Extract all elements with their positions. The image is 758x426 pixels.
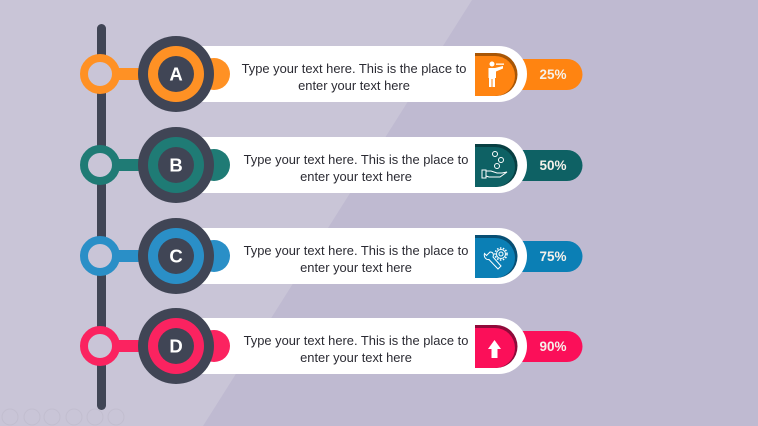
- percentage tag C: 75%: [539, 249, 567, 264]
- percentage tag C: [510, 241, 582, 272]
- white card A: [200, 46, 527, 102]
- text A: Type your text here. This is the place to: [242, 61, 466, 76]
- white card B: [200, 137, 527, 193]
- node C: C: [169, 246, 183, 266]
- node D: [84, 308, 214, 384]
- node A: [84, 36, 214, 112]
- row C: [84, 218, 582, 294]
- node A: A: [169, 64, 183, 84]
- percentage tag A: 25%: [539, 67, 567, 82]
- icon: person with telescope: [475, 53, 518, 96]
- half circle C: [198, 240, 230, 272]
- white card C: [200, 228, 527, 284]
- icon: up arrow: [475, 325, 518, 368]
- text C: Type your text here. This is the place to: [244, 243, 468, 258]
- icon: hand with coins: [475, 144, 518, 187]
- text B: enter your text here: [300, 169, 412, 184]
- text B: Type your text here. This is the place to: [244, 152, 468, 167]
- text C: enter your text here: [300, 260, 412, 275]
- half circle A: [198, 58, 230, 90]
- icon: wrench and gear: [475, 235, 518, 278]
- node D: D: [169, 336, 183, 356]
- percentage tag B: 50%: [539, 158, 567, 173]
- percentage tag D: [510, 331, 582, 362]
- half circle D: [198, 330, 230, 362]
- slideshow controls: [2, 409, 124, 425]
- row B: [84, 127, 582, 203]
- node C: [84, 218, 214, 294]
- text D: enter your text here: [300, 350, 412, 365]
- text A: enter your text here: [298, 78, 410, 93]
- node B: B: [169, 154, 183, 176]
- half circle B: [198, 149, 230, 181]
- white card D: [200, 318, 527, 374]
- node B: [84, 127, 214, 203]
- row D: [84, 308, 582, 384]
- background diagonal panel: [203, 0, 758, 426]
- vertical timeline: [97, 24, 106, 410]
- row A: [84, 36, 582, 112]
- text D: Type your text here. This is the place to: [244, 333, 468, 348]
- percentage tag D: 90%: [539, 339, 567, 354]
- percentage tag B: [510, 150, 582, 181]
- percentage tag A: [510, 59, 582, 90]
